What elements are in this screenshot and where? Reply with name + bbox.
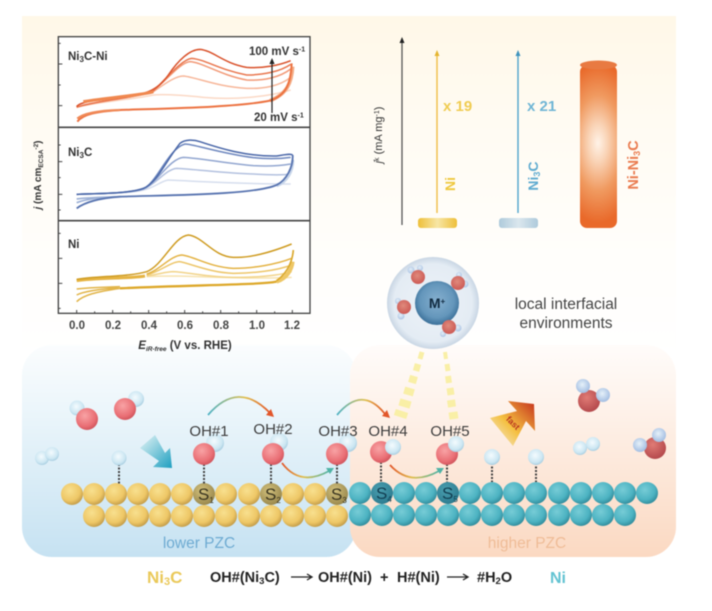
x-axis tick labels: 0.6	[177, 320, 193, 332]
label: 100 mV/s: 100 mV s	[249, 46, 299, 58]
atoms: Ni3C layers	[61, 483, 348, 527]
label: 20 mV/s: -1	[297, 112, 304, 120]
Ni-Ni3C cylinder: 3	[632, 151, 642, 156]
site labels S1 to S5: S	[265, 485, 276, 504]
panel label: Ni3C-Ni: Ni	[68, 51, 80, 63]
x-axis tick labels: 0.4	[141, 320, 158, 332]
panel label: Ni3C: C	[84, 147, 92, 159]
Ni3C bar: C	[525, 161, 541, 172]
adsorbed species on surface	[112, 433, 544, 466]
Ni-Ni3C cylinder: Ni-Ni	[626, 156, 642, 190]
Ni bar	[418, 50, 458, 228]
transfer arrows	[208, 397, 444, 478]
panel label: Ni3C-Ni: 3	[80, 55, 84, 64]
site labels S1 to S5: 5	[453, 495, 458, 504]
y-axis title: )	[33, 140, 44, 144]
reaction equation: #H	[477, 570, 496, 586]
OH labels: OH#4	[368, 423, 408, 440]
site labels S1 to S5: S	[376, 484, 387, 503]
Ni3C bar: Ni	[525, 177, 541, 191]
label: higher PZC: higher PZC	[488, 535, 566, 552]
OH labels: OH#1	[189, 423, 229, 440]
caption: local interfacial environments: environments	[519, 315, 613, 332]
y axis arrow	[400, 37, 404, 225]
Ni3C bar	[499, 50, 542, 228]
multiplier x 21: x 21	[527, 98, 556, 115]
scan-rate arrow	[269, 58, 275, 113]
y-axis title: j	[373, 160, 385, 165]
icon: solvated cation	[387, 257, 479, 349]
Ni-Ni3C cylinder	[580, 60, 642, 228]
chart: cyclic voltammetry panels	[33, 37, 310, 353]
arrow: fast desorption	[490, 401, 535, 446]
caption: local interfacial environments: local interfacial	[515, 296, 617, 313]
beams: ion to surface	[400, 352, 454, 419]
curves: Ni3C	[77, 140, 293, 208]
reaction equation	[210, 570, 512, 587]
reaction equation: 2	[496, 576, 501, 587]
panel label: Ni3C: 3	[80, 151, 84, 160]
panel label: Ni: Ni	[68, 239, 80, 251]
x-axis tick labels: 1.0	[249, 320, 265, 332]
y-axis title: (mA mg	[373, 116, 385, 157]
arrow: adsorption inflow	[140, 435, 172, 468]
site labels S1 to S5	[198, 484, 458, 505]
reaction equation: OH#(Ni)	[318, 570, 372, 586]
Ni-Ni3C cylinder: C	[626, 140, 642, 151]
y-axis title: )	[373, 107, 385, 110]
site labels S1 to S5: S	[331, 485, 342, 504]
adsorption bonds	[119, 462, 536, 484]
Ni3C bar: 3	[532, 172, 542, 177]
panel frames and ticks	[58, 37, 310, 313]
multiplier x 19: x 19	[443, 98, 472, 115]
x-axis title: iR-free	[146, 346, 167, 353]
y-axis title: ECSA	[38, 149, 45, 168]
curves: Ni	[77, 235, 293, 302]
x-axis title: E	[138, 340, 146, 352]
y-axis title: -1	[374, 110, 381, 116]
label: lower PZC: lower PZC	[163, 535, 235, 552]
icon: solvated cation: +	[440, 297, 446, 306]
reaction equation: +	[380, 570, 388, 586]
panel label: Ni3C-Ni: C-Ni	[84, 51, 108, 63]
x-axis title: (V vs. RHE)	[167, 340, 232, 352]
label: 100 mV/s: -1	[299, 46, 305, 54]
x-axis tick labels: 1.2	[284, 320, 300, 332]
x-axis tick labels: 0.8	[213, 320, 230, 332]
legend: Ni3C: Ni	[147, 568, 164, 587]
icon: solvated cation: M	[429, 295, 440, 311]
label: 20 mV/s: 20 mV s	[254, 112, 297, 124]
panel: higher PZC region	[350, 345, 676, 557]
arrow: fast desorption: fast	[504, 414, 522, 432]
y-axis title: -2	[33, 143, 40, 150]
OH labels	[189, 421, 470, 440]
Ni bar: Ni	[442, 177, 458, 191]
site labels S1 to S5: 4	[387, 495, 392, 504]
x-axis tick labels: 0.0	[69, 320, 85, 332]
legend: Ni3C: C	[170, 568, 182, 587]
site labels S1 to S5: S	[442, 484, 453, 503]
chart: specific activity comparison	[373, 37, 642, 228]
y-axis title: k	[374, 157, 381, 161]
y-axis title: j (mA cm	[33, 168, 44, 210]
reaction equation: O	[501, 570, 512, 586]
OH labels: OH#2	[253, 421, 293, 438]
curves: Ni3C-Ni	[77, 49, 293, 122]
free molecules: left	[35, 391, 144, 465]
OH labels: OH#5	[430, 423, 470, 440]
caption: local interfacial environments	[515, 296, 617, 332]
reaction equation: OH#(Ni	[210, 570, 259, 586]
site labels S1 to S5: S	[198, 485, 209, 504]
legend: Ni: Ni	[550, 570, 566, 587]
free molecules: right	[573, 379, 666, 459]
reaction equation: H#(Ni)	[397, 570, 440, 586]
panel label: Ni3C: Ni	[68, 147, 80, 159]
legend: Ni3C: 3	[164, 576, 170, 588]
site labels S1 to S5: 2	[276, 496, 281, 505]
OH labels: OH#3	[318, 423, 358, 440]
x-axis tick labels	[69, 320, 300, 332]
site labels S1 to S5: 1	[209, 496, 214, 505]
reaction equation: C)	[264, 570, 280, 586]
site labels S1 to S5: 3	[342, 496, 347, 505]
panel: lower PZC region	[22, 345, 356, 557]
x-axis tick labels: 0.2	[105, 320, 121, 332]
reaction equation: 3	[259, 576, 264, 587]
atoms: Ni layers	[349, 482, 658, 526]
